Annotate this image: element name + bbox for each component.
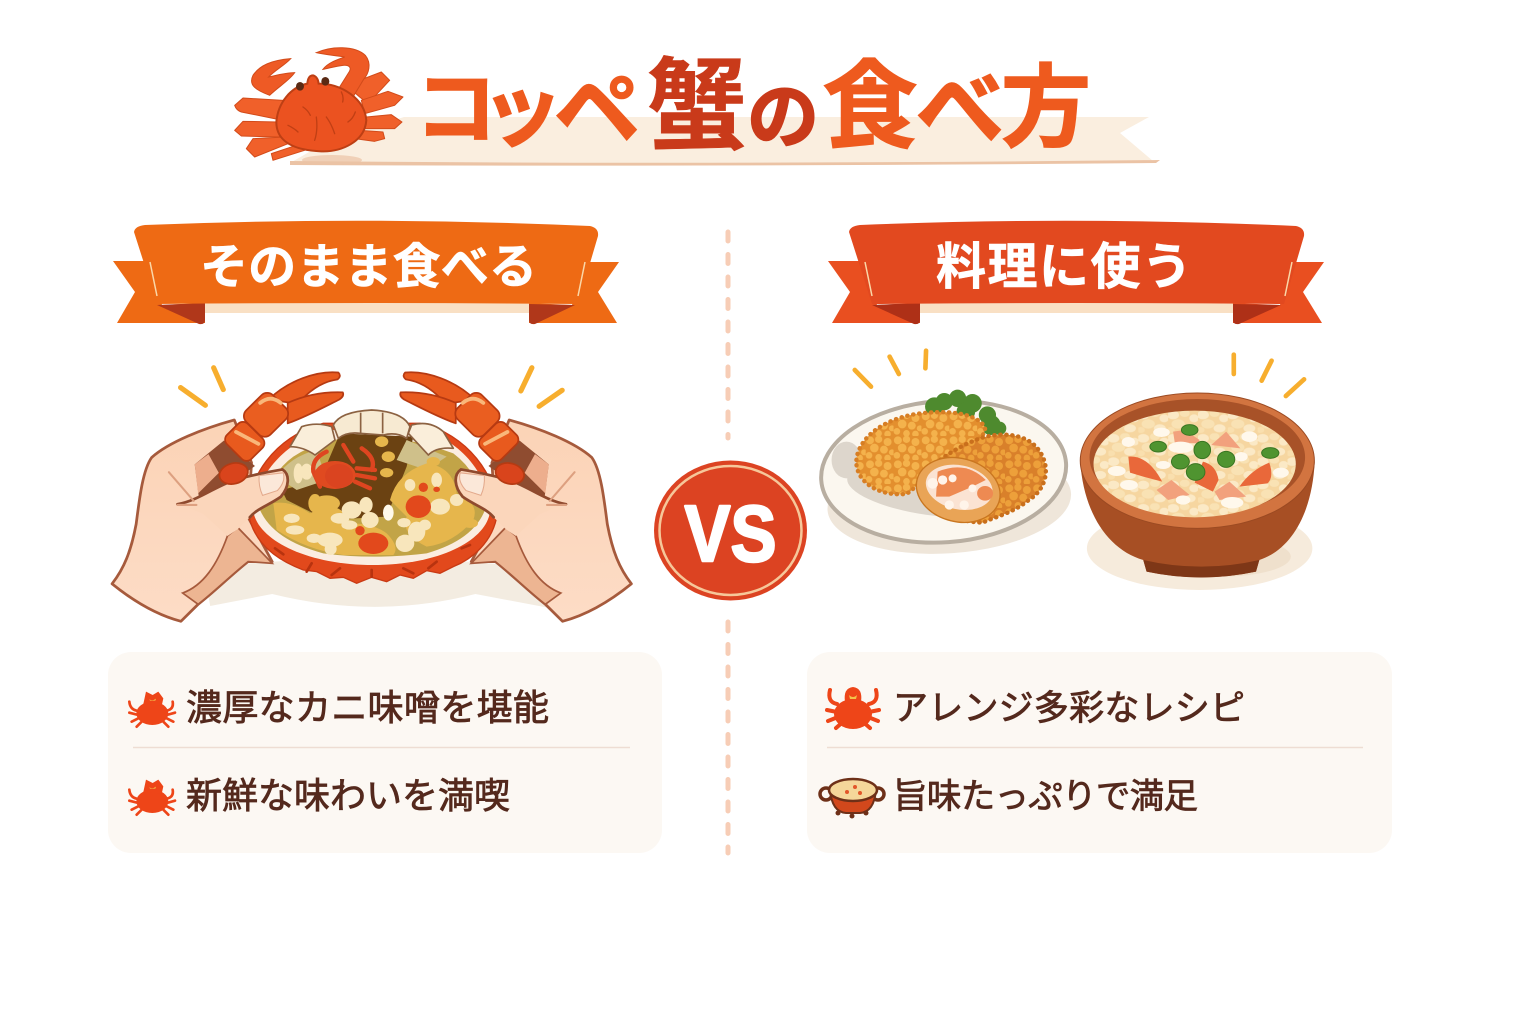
text: point 3: アレンジ多彩なレシピ — [893, 689, 1245, 728]
title: 食 — [822, 54, 918, 161]
right heading text: 料理に使う — [936, 239, 1192, 295]
panel: left points — [108, 652, 662, 853]
shadow — [203, 558, 548, 608]
icon: pot — [820, 779, 884, 818]
filling yellow blobs — [273, 436, 478, 555]
crab legs — [235, 72, 403, 160]
filling base — [260, 437, 485, 557]
crab claws — [252, 59, 295, 95]
back croquette — [856, 412, 985, 494]
right thumb — [456, 469, 575, 536]
bowl shadow — [1087, 507, 1312, 590]
left sparkle marks — [181, 368, 562, 406]
parsley — [925, 390, 1006, 435]
right sparkle marks — [855, 351, 1304, 396]
panel: right points — [807, 652, 1392, 853]
center dashed divider — [726, 232, 730, 853]
VS badge: VS — [684, 489, 776, 578]
title: ッ — [481, 66, 563, 157]
bowl — [1080, 462, 1315, 577]
title: の — [747, 78, 819, 158]
filling red roe — [355, 483, 440, 554]
banner: left heading — [113, 221, 619, 324]
right hand back — [471, 420, 631, 621]
left claw — [217, 372, 343, 487]
icon: crab 3 — [827, 687, 879, 729]
left thumb — [169, 469, 288, 536]
filling cream blobs — [284, 463, 463, 555]
thumbs and claws — [169, 368, 575, 536]
icon: crab 2 — [129, 780, 175, 815]
icon: title crab — [235, 48, 403, 160]
illustration: hands holding crab shell — [112, 368, 631, 621]
left heading text: そのまま食べる — [200, 241, 537, 294]
text: point 2: 新鮮な味わいを満喫 — [186, 775, 510, 816]
right claw — [400, 372, 526, 487]
text: point 1: 濃厚なカニ味噌を堪能 — [186, 687, 549, 728]
left hand back — [112, 420, 272, 621]
title banner — [290, 117, 1160, 166]
title: コ — [415, 64, 497, 155]
back croquette edge — [856, 412, 985, 494]
plate shadow — [824, 442, 1075, 562]
title: べ — [916, 60, 1004, 159]
VS badge — [654, 460, 807, 600]
crab body — [276, 75, 366, 151]
title: 方 — [1001, 59, 1091, 159]
plate — [816, 393, 1071, 551]
hands behind shell — [112, 420, 631, 621]
small crab in filling — [313, 445, 375, 489]
illustration: croquettes and bowl — [816, 351, 1315, 590]
text: point 4: 旨味たっぷりで満足 — [893, 778, 1198, 816]
crab shell and filling — [248, 410, 497, 583]
title: 蟹 — [647, 51, 747, 163]
banner: right heading — [828, 221, 1324, 324]
soup — [1094, 411, 1296, 517]
title — [415, 51, 1091, 163]
top white crab parts — [290, 410, 453, 455]
title: ペ — [554, 63, 640, 159]
icon: crab 1 — [129, 692, 175, 727]
front croquette — [918, 435, 1046, 523]
croquette cut face — [909, 449, 1007, 531]
